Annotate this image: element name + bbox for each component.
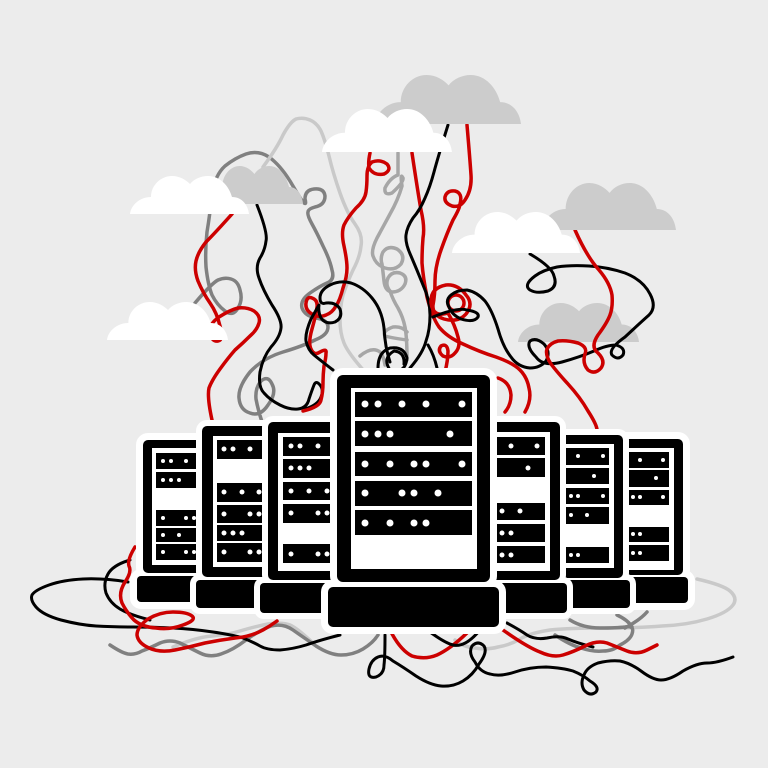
cables (32, 118, 735, 694)
cable: red bottom right (503, 630, 657, 656)
cable: red bottom centre (390, 630, 470, 658)
cable: dark grey bottom left wave (110, 625, 378, 656)
cable: black knot above centre server (378, 348, 407, 370)
cable: long black right loop (433, 254, 653, 368)
cable: black small left loop (105, 560, 150, 620)
cable: black loop centre left (306, 282, 390, 370)
cable: dark grey upper left (195, 153, 333, 425)
cable: light grey bottom left (173, 623, 313, 647)
cloud: right white (452, 212, 580, 253)
server 5: right (530, 435, 630, 608)
cable: red inner curl (448, 295, 464, 311)
cloud: lower right grey (518, 303, 639, 342)
cable: black from top grey cloud (406, 125, 448, 368)
server rack group (137, 375, 688, 627)
cable: short red arc (498, 378, 511, 412)
cloud: left white (130, 176, 249, 214)
cable: black bottom right short (507, 623, 593, 647)
cable: long black bottom wave (369, 635, 733, 694)
cable: red from centre white cloud, right (412, 153, 530, 412)
cable: red from right grey cloud (546, 230, 612, 430)
cloud: top grey (375, 75, 521, 124)
cable: mid grey curls (360, 153, 407, 365)
cable: red bottom left (121, 547, 277, 651)
server 2: left (196, 426, 302, 608)
cable: light grey arch (263, 118, 365, 372)
cable: black from left grey cloud (257, 205, 322, 409)
cable: dark grey bottom right (555, 612, 647, 651)
cable: red from left white cloud (195, 214, 259, 420)
cable: light grey big right loop (455, 579, 735, 649)
server 6: far right (600, 439, 688, 603)
server 4: inner right (470, 422, 567, 613)
cloud: left grey (205, 166, 303, 204)
server 3: inner left (260, 422, 368, 613)
cable: red from top grey cloud (431, 125, 471, 372)
cable: black bottom centre V (430, 630, 480, 645)
cloud: right grey (542, 183, 676, 230)
server: centre front (328, 375, 499, 627)
cable: black big left loop (32, 579, 340, 650)
cloud: centre white (322, 109, 452, 152)
cable: red from centre white cloud, left (303, 153, 389, 411)
server 1: far left (137, 440, 233, 602)
cloud: lower left white (107, 302, 228, 340)
